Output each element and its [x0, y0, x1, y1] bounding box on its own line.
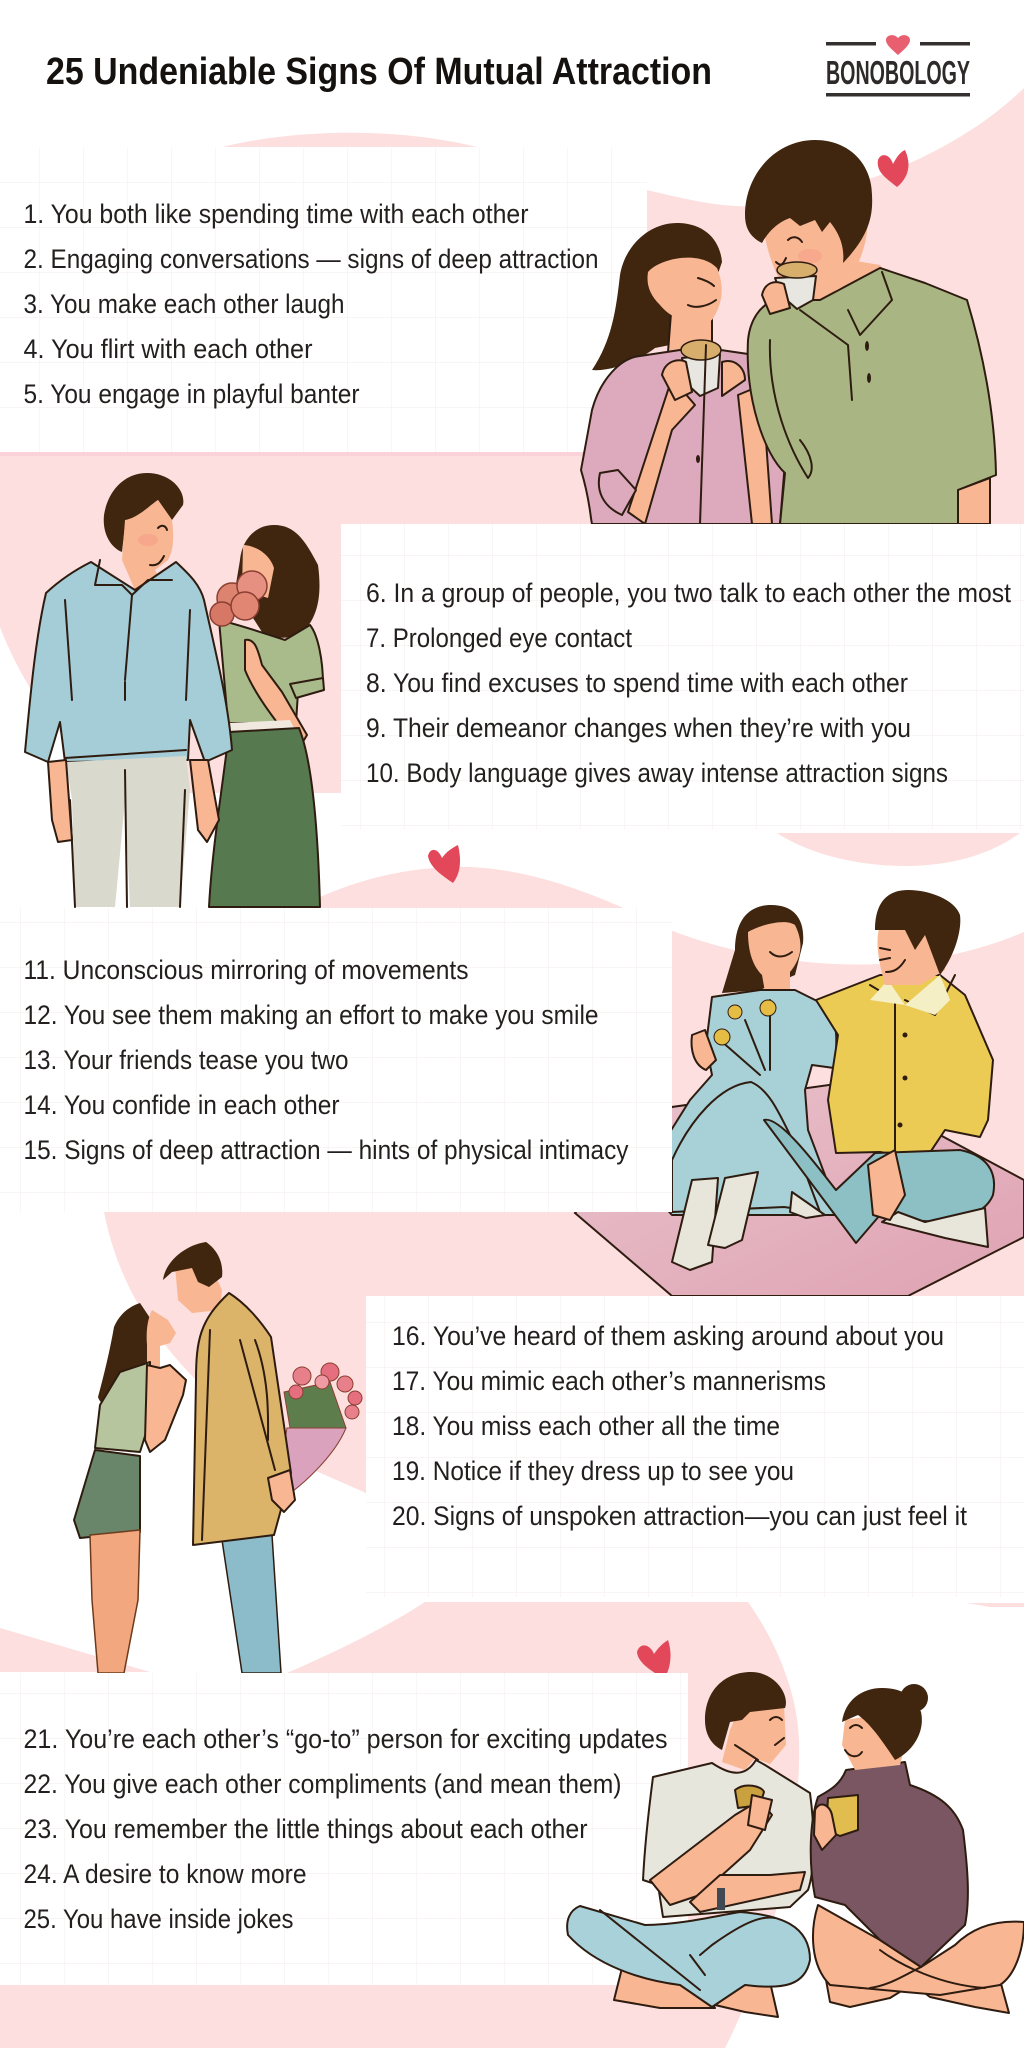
text block: signs 1 to 5: 2. Engaging conversations — signs of deep attraction — [24, 244, 598, 274]
illustration: couple with cups — [581, 140, 996, 524]
heart middle — [428, 845, 460, 883]
title: 25 Undeniable Signs Of Mutual Attraction — [46, 51, 712, 93]
illustration: couple on blanket — [575, 890, 1024, 1296]
text block: signs 21 to 25: 25. You have inside jokes — [24, 1904, 294, 1934]
text block: signs 21 to 25: 21. You’re each other’s “go-to” person for exciting updates — [24, 1724, 668, 1754]
text block: signs 1 to 5: 4. You flirt with each other — [24, 334, 313, 364]
text block: signs 11 to 15: 12. You see them making an effort to make you smile — [24, 1000, 598, 1030]
text block: signs 16 to 20 — [392, 1321, 968, 1531]
illustration: man hiding bouquet — [74, 1242, 362, 1673]
logo: Bonobology — [826, 35, 970, 96]
text block: signs 11 to 15 — [24, 955, 629, 1165]
text block: signs 16 to 20: 20. Signs of unspoken attraction—you can just feel it — [392, 1501, 968, 1531]
illustration: couple with roses — [25, 473, 324, 907]
illustration: seated couple — [567, 1672, 1024, 2017]
panel: signs 16 to 20 — [366, 1296, 1024, 1597]
text block: signs 1 to 5: 1. You both like spending time with each other — [24, 199, 529, 229]
text block: signs 6 to 10 — [366, 578, 1012, 788]
heart bottom — [637, 1640, 671, 1679]
text block: signs 16 to 20: 19. Notice if they dress up to see you — [392, 1456, 794, 1486]
text block: signs 21 to 25 — [24, 1724, 668, 1934]
text block: signs 1 to 5: 3. You make each other laugh — [24, 289, 344, 319]
panel: signs 6 to 10 — [341, 524, 1024, 830]
text block: signs 21 to 25: 24. A desire to know more — [24, 1859, 306, 1889]
text block: signs 6 to 10: 10. Body language gives away intense attraction signs — [366, 758, 948, 788]
text block: signs 6 to 10: 7. Prolonged eye contact — [366, 623, 633, 653]
text block: signs 6 to 10: 8. You find excuses to spend time with each other — [366, 668, 908, 698]
panel: signs 21 to 25 — [0, 1673, 688, 1985]
panel: signs 1 to 5 — [0, 148, 647, 456]
text block: signs 1 to 5: 5. You engage in playful banter — [24, 379, 360, 409]
text block: signs 21 to 25: 22. You give each other compliments (and mean them) — [24, 1769, 622, 1799]
text block: signs 11 to 15: 11. Unconscious mirroring of movements — [24, 955, 468, 985]
text block: signs 16 to 20: 18. You miss each other all the time — [392, 1411, 780, 1441]
text block: signs 1 to 5 — [24, 199, 598, 409]
text block: signs 16 to 20: 16. You’ve heard of them asking around about you — [392, 1321, 944, 1351]
text block: signs 11 to 15: 15. Signs of deep attraction — hints of physical intimacy — [24, 1135, 629, 1165]
text block: signs 16 to 20: 17. You mimic each other’s mannerisms — [392, 1366, 826, 1396]
text block: signs 6 to 10: 9. Their demeanor changes when they’re with you — [366, 713, 911, 743]
text block: signs 11 to 15: 13. Your friends tease you two — [24, 1045, 348, 1075]
text block: signs 21 to 25: 23. You remember the little things about each other — [24, 1814, 588, 1844]
panel: signs 11 to 15 — [0, 908, 672, 1212]
text block: signs 11 to 15: 14. You confide in each other — [24, 1090, 340, 1120]
heart top right — [878, 150, 908, 187]
